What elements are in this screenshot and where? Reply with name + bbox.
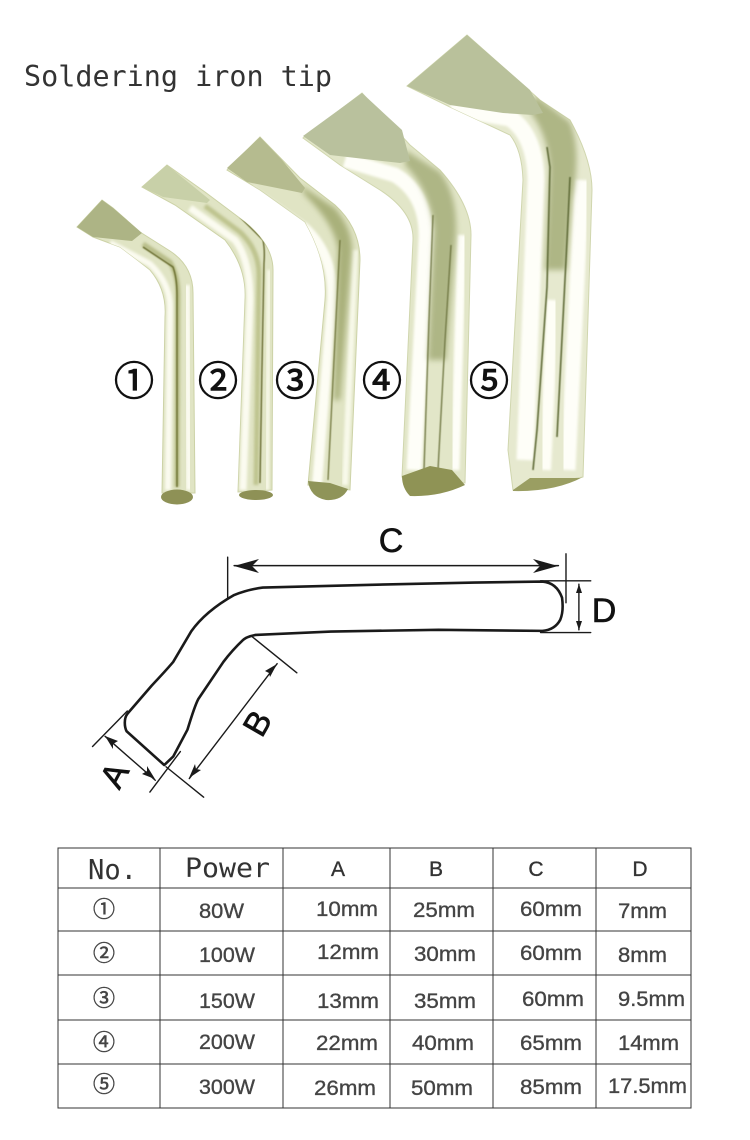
photo: soldering tip 1 <box>77 200 195 504</box>
table row 1: 10mm <box>316 897 378 921</box>
table row 3: 35mm <box>414 989 476 1013</box>
table row 2: 12mm <box>317 940 379 964</box>
table row 4: 40mm <box>412 1031 474 1055</box>
table row 4: 14mm <box>618 1031 679 1055</box>
table row 1: 25mm <box>413 898 475 922</box>
labels: tip numbers: ① <box>114 349 154 407</box>
table row 1 <box>93 892 667 924</box>
photo: soldering tip 5 <box>407 35 592 491</box>
table header <box>88 853 648 886</box>
table header: A <box>331 858 345 881</box>
table row 2: 60mm <box>520 941 582 965</box>
table row 5: 50mm <box>411 1076 473 1100</box>
table row 1: 60mm <box>520 897 582 921</box>
table row 3: 13mm <box>317 989 379 1013</box>
table row 4: ④ <box>93 1025 115 1057</box>
table header: No. <box>88 853 137 886</box>
dimension arrowheads <box>105 559 582 779</box>
table row 2: 30mm <box>414 942 476 966</box>
table row 5: 26mm <box>314 1076 376 1100</box>
table row 2: 100W <box>199 943 256 967</box>
photo: soldering tip 4 <box>303 93 471 496</box>
table row 5: 17.5mm <box>608 1074 687 1098</box>
table row 4: 200W <box>199 1030 256 1054</box>
table row 4 <box>93 1025 679 1057</box>
table row 3: 60mm <box>522 987 584 1011</box>
table row 5: 300W <box>199 1075 256 1099</box>
table row 2 <box>93 936 667 968</box>
table header: B <box>429 858 443 881</box>
table row 4: 65mm <box>520 1031 582 1055</box>
labels: tip numbers: ④ <box>362 349 402 407</box>
labels: tip numbers: ⑤ <box>469 349 509 407</box>
table header: C <box>528 858 544 881</box>
table row 3: 9.5mm <box>618 987 685 1011</box>
tip outline <box>93 554 591 797</box>
table header: D <box>632 858 648 881</box>
table row 5: 85mm <box>520 1075 582 1099</box>
dimension label D: D <box>592 592 616 630</box>
table row 1: ① <box>93 892 115 924</box>
labels: tip numbers: ② <box>198 349 238 407</box>
dimension diagram <box>93 522 616 797</box>
specification table <box>58 848 691 1108</box>
dimension label B: B <box>236 704 280 743</box>
title: Soldering iron tip <box>24 60 332 93</box>
table row 1: 7mm <box>618 899 667 923</box>
table row 2: 8mm <box>618 943 667 967</box>
table row 4: 22mm <box>316 1031 378 1055</box>
dimension label A: A <box>93 756 137 794</box>
dimension label C: C <box>379 522 403 560</box>
table row 3 <box>93 981 685 1013</box>
table row 1: 80W <box>199 899 245 923</box>
photo: soldering tip 3 <box>227 137 360 500</box>
table row 3: ③ <box>93 981 115 1013</box>
labels: tip numbers <box>114 349 509 407</box>
table row 5 <box>93 1067 687 1100</box>
table row 3: 150W <box>199 989 256 1013</box>
table header: Power <box>185 853 270 884</box>
table row 5: ⑤ <box>93 1067 115 1099</box>
photo: soldering tip 2 <box>142 165 273 500</box>
table grid <box>58 848 691 1108</box>
table row 2: ② <box>93 936 115 968</box>
labels: tip numbers: ③ <box>275 349 315 407</box>
